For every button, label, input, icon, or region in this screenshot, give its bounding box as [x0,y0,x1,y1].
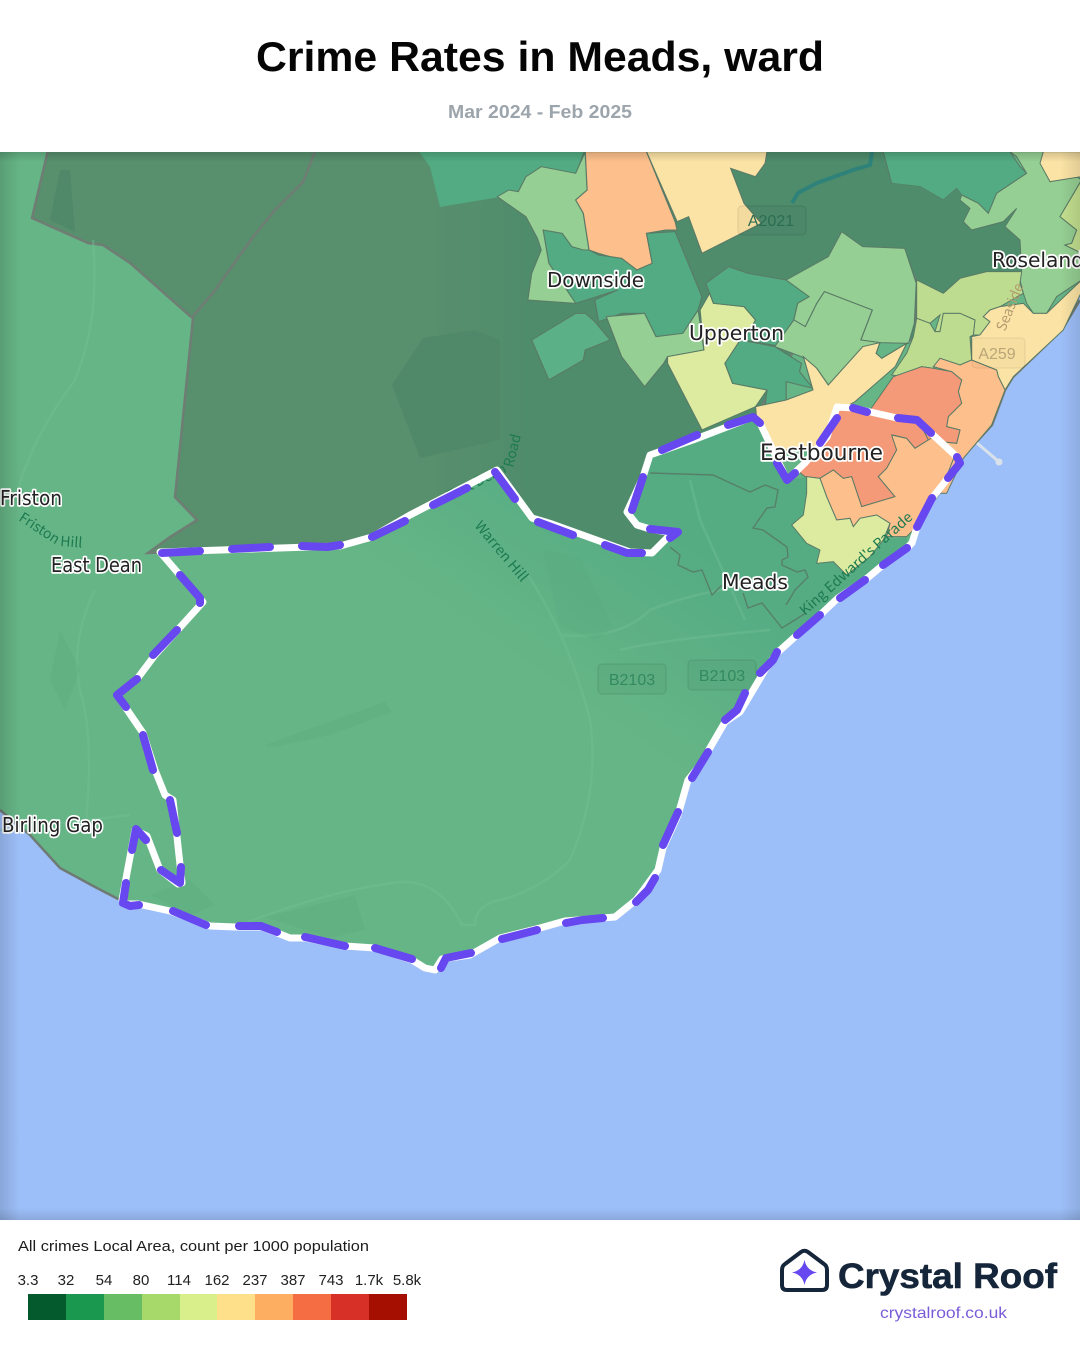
pale ward south [792,477,890,575]
pale green ward lower [892,313,975,378]
area: medium green top [418,150,500,207]
road shield: B2103 east [688,660,756,690]
legend scale values: 32 [58,1272,74,1289]
light ward centre [775,292,907,385]
boundary purple dashes [117,408,960,968]
road label: King Edward's Parade: King Edward's Parade [795,507,917,620]
road label: East Dean Road [443,432,526,505]
road label: East Dean Road: Road [498,432,526,469]
road label: Warren Hill: Warren Hill [470,516,533,586]
road label: Friston Hill: Hill [60,531,83,553]
light ward Roseland [960,152,1080,313]
subtitle: date range: Mar 2024 - Feb 2025 [448,102,632,122]
faint road network [0,240,770,832]
light green Downside [497,152,599,303]
place label: Downside: Downside [547,268,644,292]
legend scale values: 162 [204,1272,230,1289]
legend scale values: 54 [96,1272,112,1289]
wards: north-east Eastbourne [855,152,1080,493]
legend scale values: 1.7k [355,1272,384,1289]
wards: north Eastbourne [480,152,916,450]
red-orange ward [870,366,962,444]
pale ward far right [1060,180,1080,253]
place label: East Dean: East Dean [51,553,142,577]
orange ward [576,152,677,270]
ward boundary: Meads [117,407,960,970]
legend scale values: 5.8k [393,1272,422,1289]
brand name: Crystal Roof [838,1257,1057,1296]
legend title: All crimes Local Area, count per 1000 population [18,1238,369,1255]
road shield: A2021: A2021 [748,213,794,230]
pier [977,443,1002,466]
Meads internal boundaries [650,473,808,628]
pale green ward upper [917,272,1023,335]
medium ward Downside east [543,230,702,337]
legend scale values: 237 [242,1272,268,1289]
road shield: B2103 east: B2103 [699,668,745,685]
boundary white casing [117,407,960,970]
road shield: B2103 west [598,664,666,694]
orange ward south [820,435,955,537]
legend scale values: 3.3 [18,1272,38,1289]
medium ward below Upperton [725,340,813,407]
sea [0,296,1080,1220]
place label: Meads: Meads [722,570,788,594]
icon: house with star [782,1251,827,1290]
road shield: B2103 west: B2103 [609,672,655,689]
legend colour bar [28,1294,407,1320]
legend scale values: 743 [318,1272,344,1289]
place label: Friston: Friston [0,486,62,510]
logo: Crystal Roof [782,1251,1057,1322]
red-orange ward south [797,407,928,507]
dark ward inland [892,183,1022,293]
area: low-crime downland [32,150,916,553]
orange ward seafront [932,358,1005,494]
river [792,152,872,203]
place label: Eastbourne: Eastbourne [760,441,883,466]
road label: East Dean Road: East Dean [443,458,510,505]
road label: Friston Hill [15,507,83,553]
pale ward Upperton [668,293,767,430]
title: Crime Rates in Meads, ward [256,33,824,80]
yellow ward seaside [972,280,1080,390]
legend scale values: 387 [280,1272,306,1289]
area: Meads ward interior [447,422,907,702]
yellow ward centre [756,343,907,450]
light ward west of Upperton [606,310,704,387]
medium green top left [500,152,583,194]
area: dark woodland patches [70,182,433,456]
panel: choropleth map [0,150,1080,1220]
legend scale values [18,1272,422,1289]
map edge shading [0,152,1080,1220]
legend [18,1238,422,1320]
road label: Friston Hill: Friston [15,507,64,549]
place label: Upperton: Upperton [689,321,784,345]
road shield: A2021 [738,206,806,235]
yellow ward top right [1040,152,1080,182]
downland inner boundary [193,152,315,316]
website: crystalroof.co.uk [880,1305,1008,1322]
legend scale values: 80 [133,1272,149,1289]
medium ward south of Downside [532,313,610,380]
legend scale values: 114 [167,1272,191,1289]
light ward east [786,232,916,343]
map base land [0,152,1080,898]
medium ward top right [883,152,1027,213]
wards: central Eastbourne [792,407,955,575]
coastline edge [0,810,122,901]
place label: Birling Gap: Birling Gap [2,813,103,837]
road shield: A259: A259 [978,346,1016,363]
faint field patches [50,550,613,938]
road shield: A259 [972,338,1025,368]
road label: Seaside: Seaside [991,280,1028,334]
medium ward north of Upperton [706,267,809,347]
yellow ward [646,152,767,253]
